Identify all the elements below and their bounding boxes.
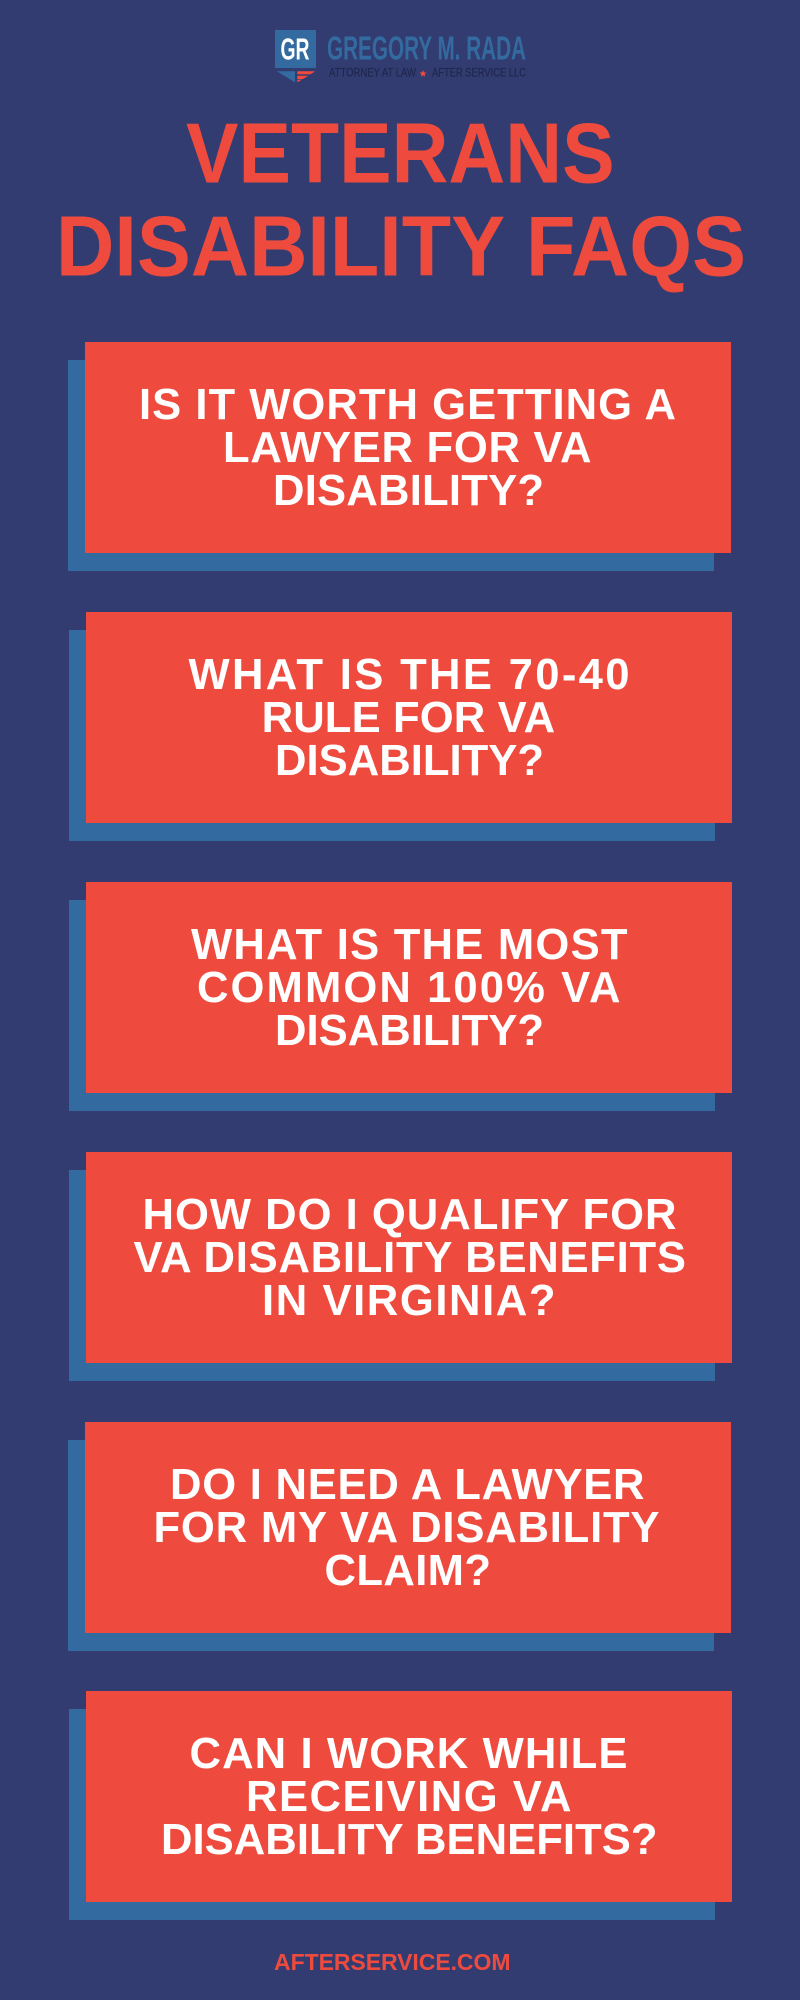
question text 6: DISABILITY BENEFITS? — [161, 1816, 658, 1864]
question text 2: WHAT IS THE 70-40 — [188, 651, 630, 699]
question text 3: WHAT IS THE MOST — [191, 921, 628, 969]
question text 4 — [134, 1191, 686, 1325]
question text 1: LAWYER FOR VA — [223, 424, 592, 472]
question text 5 — [154, 1461, 660, 1595]
question text 1: DISABILITY? — [273, 467, 544, 515]
panel: question 4 — [69, 1152, 732, 1381]
logo tagline — [329, 66, 526, 80]
question text 5: FOR MY VA DISABILITY — [154, 1504, 660, 1552]
footer website: AFTERSERVICE.COM — [274, 1949, 510, 1975]
question text 2 — [188, 651, 630, 785]
panel: question 1 — [68, 342, 731, 571]
logo: Gregory M. Rada — [275, 30, 526, 82]
panel: question 5 — [68, 1422, 731, 1651]
question text 1 — [139, 381, 676, 515]
icon: GR shield — [275, 30, 316, 82]
question text 6 — [161, 1730, 658, 1864]
question text 2: DISABILITY? — [275, 737, 544, 785]
question text 5: CLAIM? — [324, 1547, 491, 1595]
panel: question 2 — [69, 612, 732, 841]
logo tagline: AFTER SERVICE LLC — [432, 66, 526, 80]
question text 4: IN VIRGINIA? — [262, 1277, 556, 1325]
icon: GR shield: GR — [280, 32, 310, 66]
panel: question 3 — [69, 882, 732, 1111]
question text 4: VA DISABILITY BENEFITS — [134, 1234, 686, 1282]
question text 1: IS IT WORTH GETTING A — [139, 381, 676, 429]
logo name: GREGORY M. RADA — [327, 30, 526, 67]
question text 4: HOW DO I QUALIFY FOR — [142, 1191, 676, 1239]
question text 2: RULE FOR VA — [262, 694, 555, 742]
question text 5: DO I NEED A LAWYER — [170, 1461, 644, 1509]
panel: question 6 — [69, 1691, 732, 1920]
logo tagline: ATTORNEY AT LAW — [329, 66, 416, 80]
title: VETERANS — [186, 107, 615, 202]
title — [56, 107, 746, 295]
question text 6: RECEIVING VA — [246, 1773, 572, 1821]
question text 3 — [191, 921, 628, 1055]
question text 6: CAN I WORK WHILE — [190, 1730, 628, 1778]
title: DISABILITY FAQS — [56, 200, 746, 295]
question text 3: COMMON 100% VA — [197, 964, 620, 1012]
question text 3: DISABILITY? — [275, 1007, 544, 1055]
